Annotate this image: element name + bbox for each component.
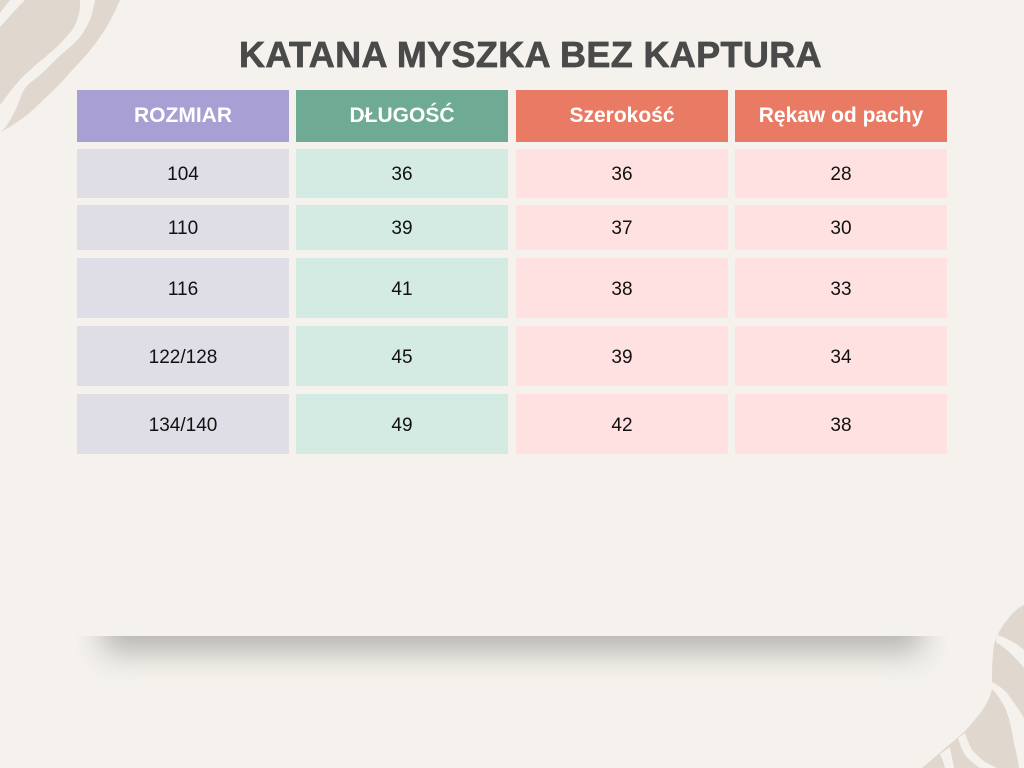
row 116: długość (296, 258, 508, 318)
row 110: długość (296, 205, 508, 250)
row 122/128: rękaw (735, 326, 947, 386)
row 116: rękaw: 33 (830, 278, 852, 300)
row 116: szerokość: 38 (611, 278, 633, 300)
row 104: rozmiar (77, 149, 289, 198)
row 104: rękaw: 28 (830, 164, 852, 185)
row 134/140: szerokość: 42 (611, 414, 633, 436)
title: KATANA MYSZKA BEZ KAPTURA (239, 34, 822, 75)
decoration: bottom-right leaf (922, 605, 1024, 768)
row 104: szerokość: 36 (611, 164, 633, 185)
row 122/128: szerokość (516, 326, 728, 386)
row 134/140: rozmiar (77, 394, 289, 454)
row 104: rękaw (735, 149, 947, 198)
decoration: top-left leaf (0, 0, 120, 132)
header: ROZMIAR: ROZMIAR (134, 104, 232, 127)
row 110: długość: 39 (391, 218, 413, 239)
header: DŁUGOŚĆ: DŁUGOŚĆ (350, 104, 454, 127)
size table (77, 90, 947, 454)
row 134/140: długość: 49 (391, 414, 413, 436)
header: Szerokość (516, 90, 728, 142)
header: DŁUGOŚĆ (296, 90, 508, 142)
row 110: rękaw: 30 (830, 218, 852, 239)
row 134/140: rękaw: 38 (830, 414, 852, 436)
row 122/128: rękaw: 34 (830, 346, 852, 368)
header: Szerokość: Szerokość (569, 104, 675, 127)
row 122/128: długość (296, 326, 508, 386)
row 134/140: rękaw (735, 394, 947, 454)
row 104: szerokość (516, 149, 728, 198)
row 110: rozmiar (77, 205, 289, 250)
row 122/128: szerokość: 39 (611, 346, 633, 368)
row 122/128: długość: 45 (391, 346, 413, 368)
row 116: rękaw (735, 258, 947, 318)
row 110: rozmiar: 110 (168, 218, 198, 239)
row 116: rozmiar: 116 (168, 278, 198, 300)
row 116: rozmiar (77, 258, 289, 318)
header: ROZMIAR (77, 90, 289, 142)
row 104: długość (296, 149, 508, 198)
row 110: rękaw (735, 205, 947, 250)
row 116: szerokość (516, 258, 728, 318)
row 104: długość: 36 (391, 164, 413, 185)
row 104: rozmiar: 104 (167, 164, 199, 185)
row 122/128: rozmiar (77, 326, 289, 386)
header: Rękaw od pachy: Rękaw od pachy (759, 104, 923, 127)
row 110: szerokość (516, 205, 728, 250)
row 134/140: szerokość (516, 394, 728, 454)
row 134/140: rozmiar: 134/140 (149, 414, 217, 436)
row 134/140: długość (296, 394, 508, 454)
row 122/128: rozmiar: 122/128 (149, 346, 217, 368)
header: Rękaw od pachy (735, 90, 947, 142)
drop shadow strip (88, 636, 936, 669)
row 116: długość: 41 (391, 278, 413, 300)
row 110: szerokość: 37 (611, 218, 633, 239)
